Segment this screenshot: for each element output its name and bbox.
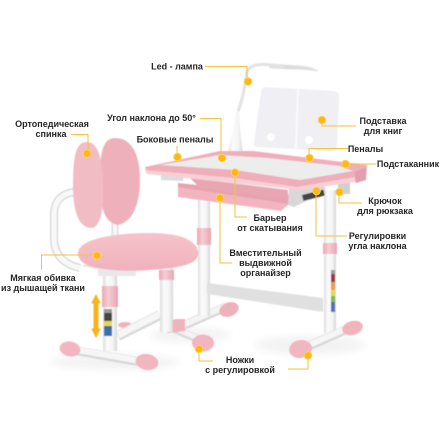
callout: side pencil cases: Боковые пеналы: [137, 134, 214, 144]
callout: tilt angle: Угол наклона до 50°: [107, 113, 196, 123]
book stand: [254, 87, 339, 151]
callout: pencil cases: Пеналы: [348, 144, 383, 154]
callout: organizer: выдвижной: [239, 258, 292, 268]
desk left leg: [197, 188, 211, 316]
desk crossbar: [207, 283, 323, 312]
chair front foot: [58, 340, 160, 372]
callout: cup holder: Подстаканник: [377, 159, 440, 169]
chair backrest tube: [54, 192, 115, 268]
callout: orthopedic back: Ортопедическая: [15, 119, 89, 129]
callout: organizer: Вместительный: [229, 248, 302, 258]
chair right column: [159, 268, 174, 332]
desk right leg: [323, 190, 337, 333]
callout: upholstery: [1, 252, 101, 293]
callout: upholstery: Мягкая обивка: [10, 273, 77, 283]
callout: backpack hook: для рюкзака: [357, 206, 414, 216]
illustration: desk and chair set: [50, 64, 367, 372]
height arrow: [92, 295, 100, 337]
callout: tilt adjustment: Регулировки: [349, 231, 406, 241]
callout: tilt angle: [107, 113, 226, 162]
callout: tilt adjustment: угла наклона: [348, 241, 408, 251]
callout: adjustable feet: [195, 345, 312, 375]
callout: barrier: Барьер: [253, 213, 287, 223]
desk top: [145, 151, 367, 190]
callout: book stand: Подставка: [360, 116, 407, 126]
callout: book stand: [318, 116, 407, 136]
drawer: [178, 178, 290, 211]
callout: barrier: от скатывания: [237, 223, 303, 233]
callout: Led lamp: Led - лампа: [151, 62, 204, 72]
chair back pads: [73, 138, 140, 228]
chair rear foot: [118, 319, 214, 352]
floor shadow: [50, 328, 365, 369]
callout: book stand: для книг: [364, 126, 402, 136]
callout: orthopedic back: [15, 119, 91, 157]
callout: tilt adjustment: [313, 187, 408, 251]
callout: barrier: [231, 169, 303, 233]
callout: Led lamp: [151, 62, 252, 85]
chair column: [102, 275, 118, 351]
callout: organizer: органайзер: [240, 268, 291, 278]
callout: side pencil cases: [137, 134, 214, 161]
callout: backpack hook: Крючок: [368, 196, 402, 206]
mechanism: [161, 172, 350, 207]
callout: orthopedic back: спинка: [36, 129, 67, 139]
callout: backpack hook: [336, 188, 414, 216]
chair crossbar: [118, 314, 160, 336]
desk right foot: [288, 319, 364, 360]
lamp: [228, 64, 318, 153]
book stand spine and holes: [267, 89, 313, 150]
callout: adjustable feet: с регулировкой: [205, 365, 275, 375]
callout: organizer: [216, 194, 302, 278]
callout: cup holder: [342, 159, 440, 169]
callout: upholstery: из дышащей ткани: [1, 283, 85, 293]
callout: adjustable feet: Ножки: [226, 355, 254, 365]
desk rear foot: [178, 300, 241, 328]
chair seat: [78, 233, 198, 276]
callout: pencil cases: [306, 144, 383, 162]
